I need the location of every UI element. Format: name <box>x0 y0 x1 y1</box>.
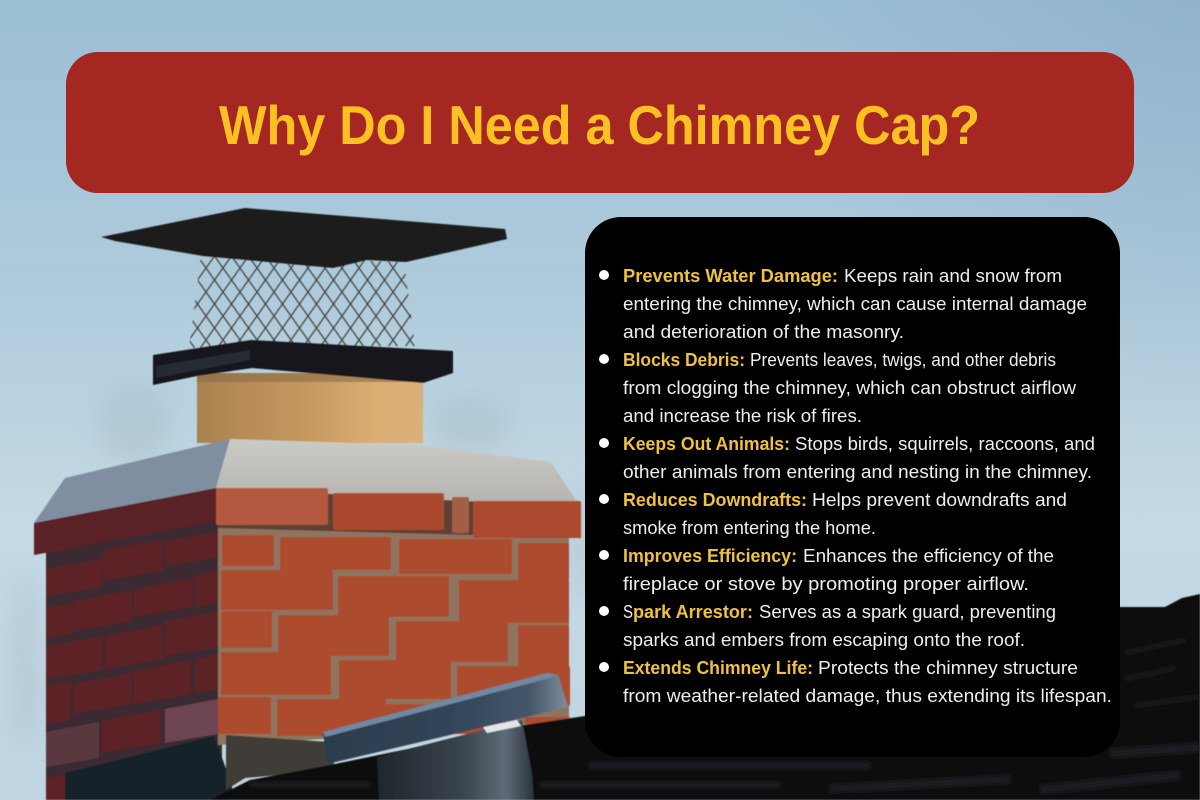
brick body: right lit face <box>218 520 570 745</box>
brick crown course: lit side <box>216 488 581 538</box>
concrete crown: lit face <box>216 439 580 507</box>
benefit: spark arrestor: Serves as a spark guard, preventing <box>759 602 1056 622</box>
wire mesh of the cap <box>189 256 415 348</box>
benefit: blocks debris: Blocks Debris: <box>623 350 745 370</box>
benefit: blocks debris <box>599 350 1077 426</box>
title banner <box>66 52 1134 193</box>
concrete crown: shaded face <box>34 439 230 523</box>
benefit: improves efficiency: Improves Efficiency: <box>623 546 797 566</box>
benefit: extends chimney life: Extends Chimney Life: <box>623 658 813 678</box>
brick crown course: shaded side <box>34 488 218 555</box>
benefit: improves efficiency: Enhances the efficiency of the <box>803 546 1054 566</box>
benefit: prevents water damage: Prevents Water Damage: <box>623 266 838 286</box>
smoke haze around chimney <box>11 385 599 750</box>
benefit: reduces downdrafts: smoke from entering the home. <box>623 518 876 538</box>
benefit: prevents water damage: Keeps rain and snow from <box>844 266 1062 286</box>
benefit: prevents water damage: entering the chimney, which can cause internal damage <box>623 294 1087 314</box>
benefit: keeps out animals: Keeps Out Animals: <box>623 434 790 454</box>
brick body: left shaded face <box>46 520 222 800</box>
cap mounting band <box>153 340 453 385</box>
chimney photograph illustration <box>34 208 1200 800</box>
benefit: keeps out animals: other animals from entering and nesting in the chimney. <box>623 462 1092 482</box>
benefit: blocks debris: Prevents leaves, twigs, and other debris <box>750 350 1056 370</box>
benefit: blocks debris: from clogging the chimney, which can obstruct airflow <box>623 378 1077 398</box>
benefit: keeps out animals <box>599 434 1095 482</box>
benefit: prevents water damage <box>599 266 1087 342</box>
benefit: spark arrestor: park Arrestor: <box>633 602 753 622</box>
flashing at chimney base <box>65 735 335 800</box>
flue pipe <box>197 373 423 443</box>
benefit: reduces downdrafts: Reduces Downdrafts: <box>623 490 807 510</box>
benefit: blocks debris: and increase the risk of fires. <box>623 406 862 426</box>
benefit: improves efficiency <box>599 546 1054 594</box>
benefit: reduces downdrafts: Helps prevent downdrafts and <box>812 490 1067 510</box>
benefit: prevents water damage: and deterioration of the masonry. <box>623 322 904 342</box>
benefit: reduces downdrafts <box>599 490 1067 538</box>
chimney cap roof <box>101 208 507 268</box>
benefit: extends chimney life <box>599 658 1112 706</box>
benefit: spark arrestor: S <box>623 602 633 622</box>
title: Why Do I Need a Chimney Cap? <box>219 94 980 156</box>
benefit: keeps out animals: Stops birds, squirrels, raccoons, and <box>795 434 1095 454</box>
roof vent <box>323 673 568 800</box>
benefit: extends chimney life: Protects the chimney structure <box>818 658 1078 678</box>
benefit: spark arrestor <box>599 602 1056 650</box>
benefit: spark arrestor: sparks and embers from escaping onto the roof. <box>623 630 1025 650</box>
benefit: extends chimney life: from weather-related damage, thus extending its lifespan. <box>623 686 1112 706</box>
rooftop shingles <box>210 594 1200 800</box>
panel: chimney cap benefits <box>585 217 1120 757</box>
benefit: improves efficiency: fireplace or stove by promoting proper airflow. <box>623 574 1029 594</box>
